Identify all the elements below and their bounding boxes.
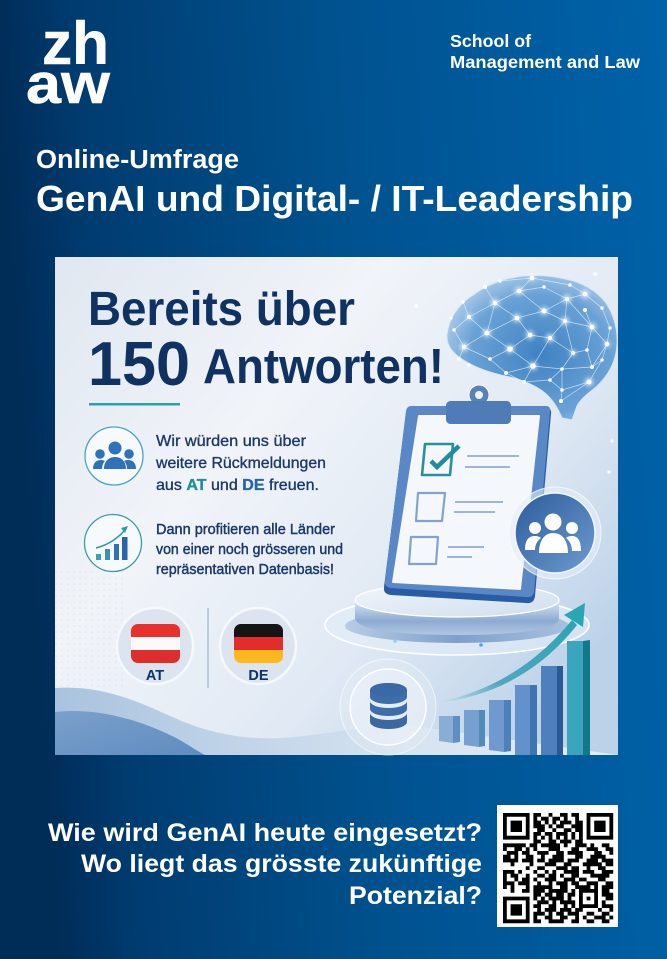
text: request: aus AT und DE freuen.	[156, 477, 319, 494]
subtitle: Online-Umfrage	[36, 146, 239, 174]
title: GenAI und Digital- / IT-Leadership	[36, 178, 633, 219]
QR code	[497, 805, 618, 927]
checked item	[422, 444, 519, 475]
heading: 150	[88, 330, 190, 399]
badge: Austria: AT	[146, 668, 164, 684]
icon: growth chart	[84, 514, 142, 572]
text: request: Wir würden uns über	[156, 433, 307, 450]
icon: network brain	[414, 272, 617, 474]
arrow: growth	[435, 603, 585, 703]
logo: zhaw	[26, 10, 111, 116]
clipboard	[384, 385, 551, 603]
school name	[450, 31, 640, 72]
panel: illustration	[55, 257, 618, 755]
question text: Wie wird GenAI heute eingesetzt?	[48, 819, 482, 847]
unchecked item	[416, 493, 503, 521]
logo: zhaw: aw	[26, 52, 111, 116]
logo: zhaw: zh	[42, 10, 109, 77]
text: benefit: Dann profitieren alle Länder	[156, 521, 335, 538]
bar chart	[439, 640, 590, 755]
question text: Wo liegt das grösste zukünftige	[81, 850, 482, 878]
pedestal	[325, 583, 589, 655]
text: benefit: von einer noch grösseren und	[156, 541, 343, 558]
badge: Germany: DE	[248, 668, 269, 684]
text: request	[155, 433, 326, 494]
heading: Antworten!	[203, 340, 444, 394]
icon: people	[85, 427, 143, 485]
text: request: weitere Rückmeldungen	[155, 455, 326, 472]
icon: community badge	[509, 487, 601, 579]
clip	[446, 385, 511, 424]
icon: database	[340, 659, 436, 755]
badge: Germany	[220, 608, 296, 684]
question text: Potenzial?	[349, 882, 482, 910]
school name: Management and Law	[450, 52, 640, 72]
text: benefit	[156, 521, 343, 578]
heading: Bereits über	[88, 283, 355, 336]
badge: Austria	[117, 608, 193, 684]
decorative waves	[55, 688, 618, 755]
school name: School of	[450, 31, 531, 51]
question text	[48, 819, 482, 910]
heading	[88, 283, 444, 399]
unchecked item	[409, 537, 484, 564]
text: benefit: repräsentativen Datenbasis!	[156, 561, 334, 578]
